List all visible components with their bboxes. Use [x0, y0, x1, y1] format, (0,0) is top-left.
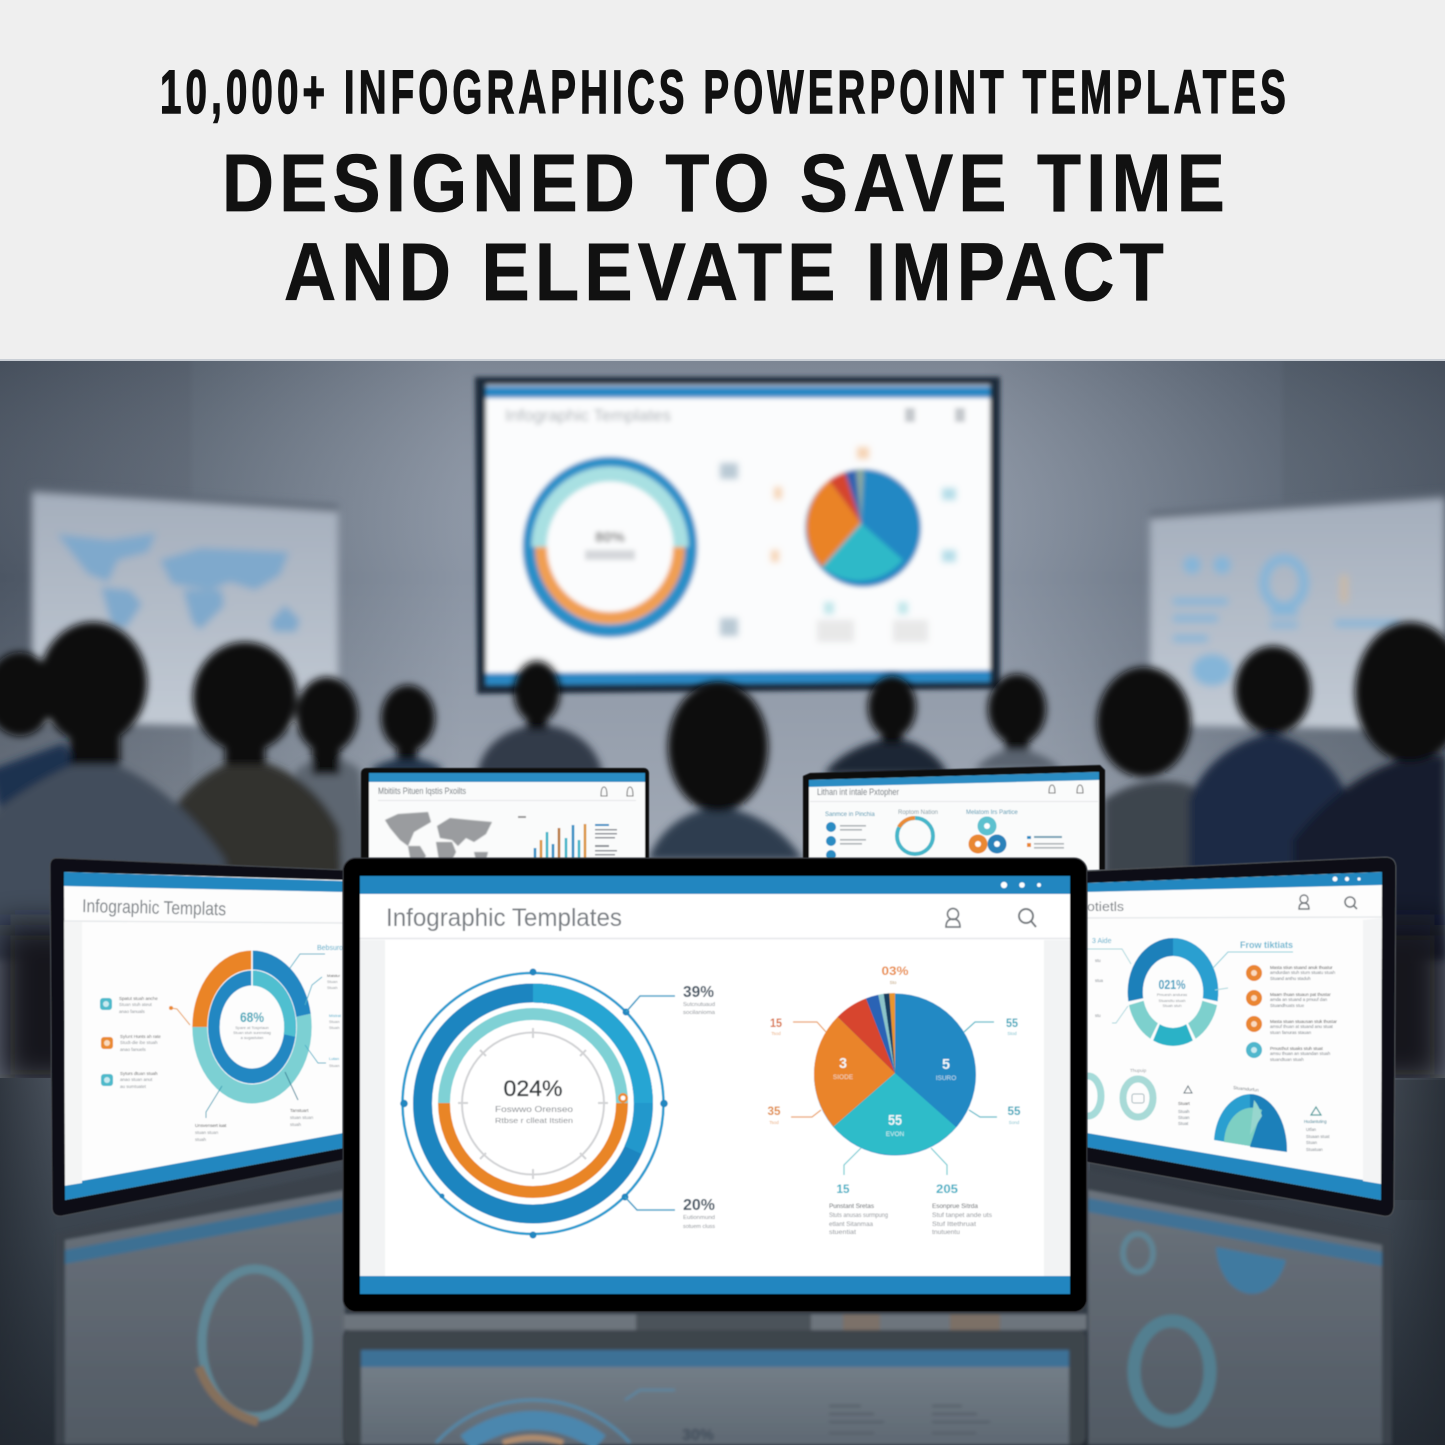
ring centre caption — [495, 1104, 573, 1125]
ring icon — [1132, 1094, 1144, 1103]
silhouette: central attendee — [648, 682, 803, 860]
pie label: upper right: 55 — [1006, 1016, 1018, 1030]
list text: stuandtuan stuah — [1270, 1057, 1304, 1062]
heading leader line — [1213, 952, 1293, 968]
left callout lines — [1087, 949, 1228, 1023]
list text: Stuandhuats stue — [1270, 1003, 1305, 1008]
pie caption: right block: Stuf Ittethruat — [932, 1222, 976, 1228]
pie slice captions: EVON — [886, 1131, 905, 1138]
bottom captions: stuah — [195, 1137, 207, 1142]
right callout text — [327, 973, 342, 1068]
pie label: upper left — [770, 1016, 826, 1036]
ring centre caption: Foswwo Orenseo — [495, 1104, 573, 1114]
search icon — [1019, 909, 1036, 927]
pie label: top orange value: Sto — [890, 980, 897, 985]
list text: stuan fanuras stauan — [1270, 1030, 1312, 1035]
headline: line one: DESIGNED TO SAVE TIME — [222, 138, 1230, 229]
tablet title: Infographic Templats — [82, 895, 226, 919]
list text: Masta stuan stuausan stuk thustar — [1270, 1019, 1337, 1024]
right callout text: Stuan — [329, 1063, 339, 1068]
pie label: lower left — [768, 1104, 821, 1125]
list text: amda an stuand a pmuuf dan — [1270, 997, 1328, 1002]
callout: 20 percent: sotuem cluss — [683, 1224, 715, 1230]
bottom captions: stuan stuan — [290, 1115, 314, 1120]
list text: amsuf thuan at stuand anu stuat — [1270, 1024, 1334, 1029]
reflected gauge — [1216, 1247, 1286, 1294]
tablet frame — [1085, 857, 1396, 1216]
pie label: bottom right — [931, 1148, 958, 1196]
header band — [0, 0, 1445, 359]
gauge chart — [1214, 1094, 1287, 1152]
reflected small ring — [1123, 1234, 1153, 1272]
pie label: upper left: 15 — [770, 1016, 782, 1030]
callout lines — [206, 954, 326, 1118]
right callout text: Stuan — [329, 1019, 339, 1024]
bottom captions: stuan stuan — [195, 1130, 219, 1135]
bullet text — [840, 825, 866, 845]
center tablet — [343, 858, 1087, 1312]
tablet screen — [64, 872, 343, 1200]
callout: 39 percent: Sutcnutuaud — [683, 1002, 715, 1008]
pie label: upper right: Stod — [1007, 1031, 1017, 1036]
header icons — [1049, 785, 1083, 793]
pie caption: right block: Esonprue Sitrda — [932, 1204, 979, 1210]
pie caption: left block: stuentiat — [829, 1230, 856, 1236]
pie chart — [814, 993, 976, 1156]
silhouette: attendee centre-right — [824, 676, 948, 775]
donut chart — [1135, 947, 1211, 1037]
top bar — [360, 876, 1070, 894]
section labels — [825, 810, 1018, 818]
pie slice labels: 3 — [839, 1055, 847, 1072]
pie label: lower right: 55 — [1008, 1104, 1021, 1118]
callout: 20 percent: Eutionmund — [683, 1215, 715, 1221]
section labels: Sanmce in Pinchia — [825, 812, 875, 818]
gauge side text: Stuatuan — [1306, 1147, 1323, 1152]
pie label: bottom left — [836, 1148, 861, 1196]
separator icon text: Stuah — [1178, 1109, 1190, 1114]
pie label: top orange value — [882, 964, 909, 985]
donut caption: a sugastulan — [241, 1035, 263, 1040]
pie label: top orange value: 03% — [882, 964, 909, 978]
list text: Spatut stuah anche — [119, 996, 158, 1001]
silhouette: attendee centre-left — [372, 685, 442, 775]
silhouette: far left attendee — [0, 652, 90, 815]
heading: Frow tiktiats — [1240, 940, 1293, 951]
screen header icons — [905, 408, 965, 422]
list text: Sylunt Hunts ah rate — [120, 1034, 161, 1039]
donut value: 021% — [1158, 977, 1186, 992]
pie slice captions — [833, 1074, 956, 1138]
left fragments: 3 Aide — [1092, 938, 1112, 945]
reflected ring — [436, 1400, 630, 1443]
list text: Syturs dtuan stuah — [120, 1071, 158, 1076]
list text: Maam thuan stuaun pat thustar — [1270, 992, 1331, 997]
donut caption — [233, 1025, 271, 1040]
silhouette: attendee in front of screen — [477, 661, 603, 775]
gauge side text: Hudantuting — [1304, 1119, 1327, 1124]
silhouette: far right attendee — [1293, 622, 1445, 960]
orange marker — [618, 1093, 628, 1103]
tabletop — [0, 1078, 1445, 1445]
audience silhouettes — [0, 622, 1445, 960]
reflected value: 30% — [682, 1427, 714, 1444]
separator icon text: Stuart — [1178, 1101, 1190, 1106]
reflected leader line — [625, 1390, 675, 1400]
back tablet, left — [361, 768, 649, 868]
right wall banner with charts — [1150, 492, 1445, 730]
pie slice labels: 55 — [888, 1112, 902, 1129]
list text: Stuan stuh ateut — [119, 1002, 153, 1007]
list icons — [100, 998, 113, 1086]
bottom captions — [195, 1108, 314, 1142]
gauge side text — [1304, 1119, 1330, 1152]
gauge side text: Stuan — [1306, 1140, 1318, 1145]
section labels: Melatom Irs Partice — [966, 810, 1018, 816]
screen pie chart — [805, 469, 921, 587]
left wall banner with world map — [32, 486, 338, 728]
chart axis label — [518, 816, 526, 818]
donut caption: Stuandtu stuah — [1159, 998, 1185, 1003]
bell icon — [1299, 895, 1309, 909]
table edge shading — [0, 1078, 1445, 1445]
small ring chart — [1123, 1079, 1153, 1117]
silhouette: attendee right — [974, 674, 1062, 770]
right callout text: Mistrat — [329, 1013, 342, 1018]
pie slice captions: SIODE — [833, 1074, 854, 1081]
list text: anao fanuals — [119, 1009, 146, 1014]
list text: amdurdan stuh stum stuatu stuah — [1270, 970, 1336, 975]
left tablet — [50, 858, 352, 1216]
list text: anao fanuels — [120, 1047, 147, 1052]
chart legend text — [595, 824, 617, 856]
small triangle icon — [1184, 1086, 1192, 1093]
world map — [384, 811, 492, 858]
screen title: Infographic Templates — [505, 406, 671, 425]
tablet title: Infographic Templates — [386, 904, 622, 932]
orange callout arrow — [171, 1008, 190, 1025]
screen ring value: 80% — [595, 529, 625, 546]
legend text — [1027, 836, 1064, 849]
right callout text: Maistur — [327, 973, 341, 978]
tablet screen — [360, 876, 1070, 1294]
pie caption: left block — [829, 1204, 888, 1236]
bottom captions: Unsvensert iuat — [195, 1123, 227, 1128]
tablet title: Mbitiits Pituen Iqstis Pxoilts — [378, 786, 466, 797]
donut chart — [200, 947, 304, 1094]
callout heading: Bebsuroics — [317, 945, 352, 952]
separator icon text — [1178, 1101, 1190, 1126]
lower dark band behind tablets — [0, 925, 1445, 1085]
bar chart — [533, 823, 587, 858]
side gutters — [360, 940, 1070, 1276]
callout dot — [169, 1006, 173, 1010]
left fragments: stua — [1095, 978, 1104, 983]
list text: au sumtuatet — [120, 1084, 147, 1089]
tablet frame — [50, 858, 345, 1216]
gauge side text: Utfan — [1306, 1127, 1317, 1132]
reflection: left tablet — [55, 1170, 345, 1445]
pie caption: left block: etlant Sitanmaa — [829, 1222, 874, 1228]
pie label: lower right: Sond — [1009, 1120, 1020, 1125]
pie slice labels: 5 — [942, 1056, 950, 1073]
silhouette: right attendee, navy jacket — [1189, 646, 1352, 960]
pie label: bottom right: 205 — [936, 1182, 958, 1196]
tablet title remnant: otietls — [1087, 899, 1125, 914]
callout: 39 percent: 39% — [683, 984, 714, 1001]
silhouette: right front attendee — [1097, 667, 1230, 960]
screen callout blocks — [720, 447, 956, 642]
donut value: 68% — [240, 1009, 264, 1025]
ring centre caption: Rtbse r clleat Itstien — [495, 1116, 573, 1125]
pie caption: right block: Stuf tanpet ande uts — [932, 1213, 992, 1219]
callout: 20 percent — [625, 1197, 715, 1230]
separator icon text: Stuan — [1178, 1115, 1190, 1120]
projector screen — [475, 377, 1000, 694]
ring centre value: 024% — [504, 1076, 562, 1101]
list text — [1270, 965, 1337, 1062]
separator icon text: Stuat — [1178, 1121, 1189, 1126]
list text: anao stuan anut — [120, 1077, 153, 1082]
reflected donut — [1134, 1321, 1210, 1421]
pie label: upper left: Tsod — [771, 1031, 781, 1036]
bottom captions: stuah — [290, 1122, 302, 1127]
reflected text blocks — [829, 1405, 990, 1434]
hexagon cluster — [968, 816, 1006, 854]
headline: line two: AND ELEVATE IMPACT — [284, 227, 1169, 318]
callout: 39 percent: socilanioma — [683, 1010, 716, 1016]
section labels: Roptom Nation — [898, 810, 938, 816]
gauge side text: Stuaan stuat — [1306, 1134, 1330, 1139]
list text — [119, 996, 161, 1089]
pie slice captions: ISURO — [936, 1075, 956, 1082]
header icons — [601, 787, 633, 796]
blurred map shapes — [57, 533, 300, 632]
pie caption: right block: tnutuentu — [932, 1230, 960, 1236]
callout: 20 percent: 20% — [683, 1197, 715, 1214]
pie label: lower left: 35 — [768, 1104, 781, 1118]
bell icon — [946, 908, 960, 927]
screen ring chart — [529, 463, 691, 631]
left fragments: stu — [1095, 958, 1101, 963]
screen ring caption — [585, 550, 635, 560]
silhouette: second front attendee — [170, 642, 345, 960]
list text: Masta stiun stuand anuk thuatur — [1270, 965, 1333, 970]
reflected strip under the frame — [343, 1314, 1087, 1330]
reflected ring — [202, 1269, 308, 1417]
back tablet, right — [803, 765, 1105, 870]
left fragments: stu — [1095, 1013, 1101, 1018]
bullet icons — [826, 822, 836, 860]
donut caption — [1157, 992, 1187, 1008]
reflection: center tablet — [343, 1314, 1087, 1445]
right tablet — [1075, 857, 1396, 1216]
gauge caption: Stuamdurfun — [1233, 1085, 1260, 1093]
list icons — [1246, 965, 1262, 1058]
tablet frame — [343, 858, 1087, 1312]
pie caption: left block: Punstant Sretas — [829, 1204, 874, 1210]
donut caption: Stuah stuh — [1162, 1003, 1182, 1008]
pie caption: right block — [932, 1204, 992, 1236]
right callout text: Stuah — [329, 1025, 339, 1030]
donut caption: Pmuesh anduras — [1157, 992, 1187, 997]
right callout text: Lutan — [329, 1056, 339, 1061]
top bar dots — [1001, 882, 1041, 888]
tablet screen — [1087, 872, 1382, 1200]
top bar dots — [1332, 876, 1361, 882]
donut caption: Spare at Tospriaun — [235, 1025, 269, 1030]
pie slice labels — [839, 1055, 950, 1129]
right callout text: Stuan — [327, 979, 337, 984]
bottom captions: Tanstuart — [290, 1108, 309, 1113]
callout: 39 percent — [626, 984, 716, 1016]
donut caption: Stuan stuh surenstag — [233, 1030, 271, 1035]
list text: Studt-die ibe stuah — [120, 1040, 158, 1045]
ring tick marks — [458, 1028, 608, 1179]
conference room background — [0, 359, 1445, 1089]
pie label: bottom left: 15 — [836, 1182, 850, 1196]
recycle icon — [1311, 1107, 1321, 1115]
small ring chart — [897, 818, 933, 854]
pie label: lower left: Tsod — [769, 1120, 779, 1125]
reflection: right tablet — [1088, 1170, 1392, 1445]
right callout text: Stuah — [327, 985, 337, 990]
tablet title: Lithan int intale Pxtopher — [817, 787, 899, 798]
bottom bar — [360, 1276, 1070, 1294]
silhouette: attendee near centre-left — [296, 677, 372, 880]
ring nodes — [400, 968, 668, 1238]
ring chart — [402, 973, 664, 1234]
silhouette: front left attendee — [0, 622, 240, 960]
pie label: upper right — [964, 1016, 1018, 1036]
ring caption: Thupuip — [1130, 1068, 1147, 1073]
list text: Pmusthut stuaks stuh stuat — [1270, 1046, 1323, 1051]
pie label: lower right — [969, 1104, 1021, 1125]
search icon — [1345, 897, 1357, 909]
list text: amsu thuan an stuandan stuah — [1270, 1051, 1331, 1056]
pie caption: left block: Stuts anusas surmpung — [829, 1213, 888, 1219]
list text: Stuand anthu staduh — [1270, 976, 1311, 981]
left fragments — [1092, 938, 1112, 1018]
partial ring chart — [1087, 1072, 1105, 1120]
